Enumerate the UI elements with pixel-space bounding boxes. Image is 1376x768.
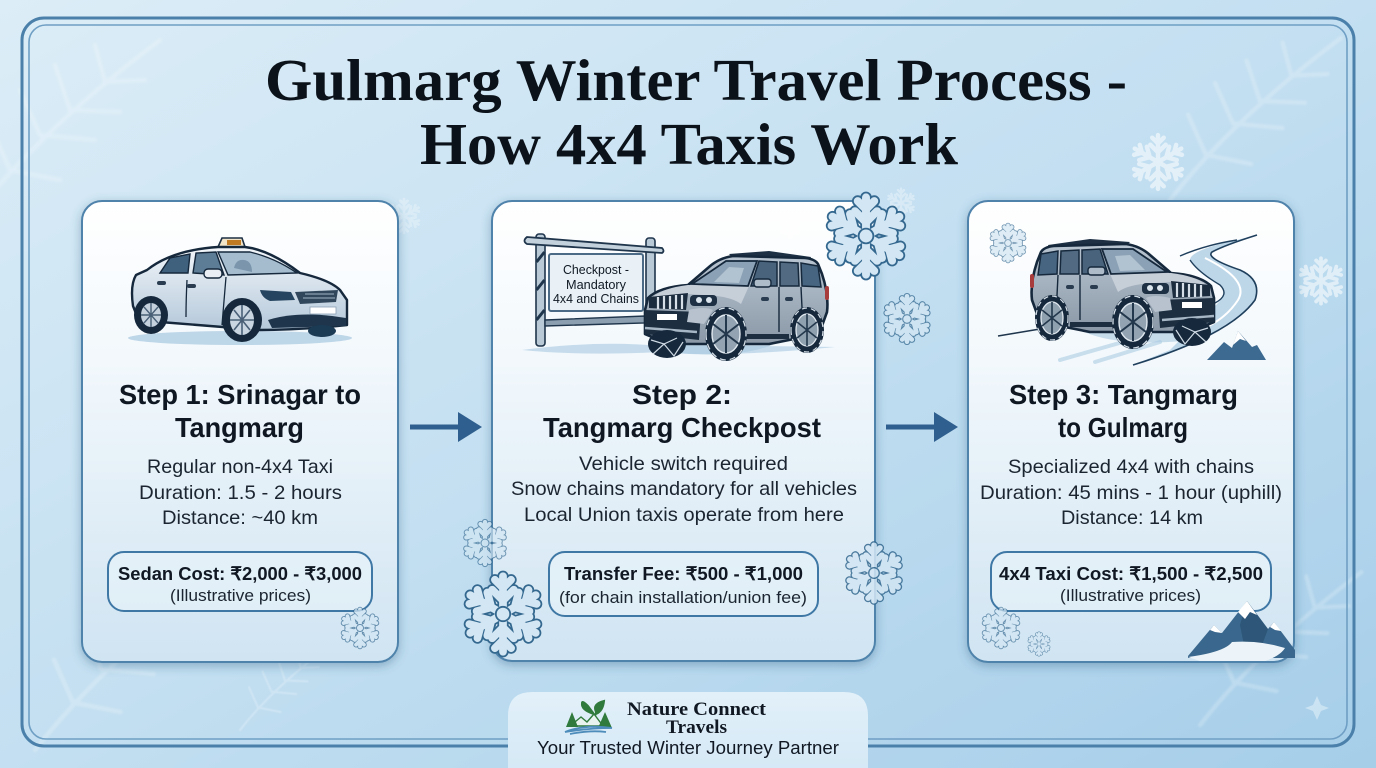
cost box — [991, 552, 1271, 611]
panel: step 3 — [968, 201, 1295, 662]
footer badge — [508, 692, 868, 768]
panel: step 2 — [492, 201, 875, 661]
details: Snow chains mandatory for all vehicles — [511, 478, 857, 500]
heading: Step 3: Tangmarg — [1009, 379, 1238, 410]
fee box — [549, 552, 818, 616]
illustration: 4x4 at checkpost — [645, 251, 829, 361]
snowflakes around step 2 — [464, 197, 930, 652]
details — [139, 456, 342, 529]
details — [980, 456, 1282, 529]
illustration: checkpost sign: 4x4 and Chains — [553, 291, 639, 306]
arrow: step 2 to 3 — [886, 412, 958, 442]
details: Regular non-4x4 Taxi — [147, 456, 333, 478]
heading: Step 2: — [632, 379, 732, 410]
cost box: (Illustrative prices) — [1060, 587, 1201, 605]
background snowflakes — [387, 135, 1344, 720]
heading: Step 1: Srinagar to — [119, 379, 361, 410]
cost box: 4x4 Taxi Cost: ₹1,500 - ₹2,500 — [999, 563, 1263, 584]
heading: to Gulmarg — [1058, 412, 1188, 443]
cost box: Sedan Cost: ₹2,000 - ₹3,000 — [118, 563, 362, 584]
illustration: checkpost sign — [522, 234, 835, 354]
title — [265, 47, 1127, 177]
footer badge: Your Trusted Winter Journey Partner — [537, 738, 839, 758]
icon: mountain small — [1207, 331, 1266, 360]
arrow: step 1 to 2 — [410, 412, 482, 442]
illustration: taxi — [128, 238, 352, 345]
cost box: (Illustrative prices) — [170, 587, 311, 605]
panel: step 1 — [82, 201, 398, 662]
illustration: 4x4 on road — [1030, 239, 1214, 349]
cost box — [108, 552, 372, 611]
icon: small snowflakes — [982, 225, 1050, 655]
details: Distance: ~40 km — [162, 507, 318, 529]
illustration: winding road — [998, 235, 1257, 365]
fee box: Transfer Fee: ₹500 - ₹1,000 — [564, 563, 803, 584]
details: Distance: 14 km — [1061, 507, 1203, 529]
icon: snowflake — [341, 610, 379, 646]
heading: Tangmarg — [175, 412, 304, 443]
logo — [565, 701, 612, 734]
details — [511, 453, 857, 526]
footer badge: Nature Connect — [627, 700, 767, 720]
illustration: checkpost sign: Checkpost - — [563, 262, 629, 277]
illustration: checkpost sign: Mandatory — [566, 277, 626, 292]
heading — [1009, 379, 1238, 443]
details: Vehicle switch required — [579, 453, 788, 475]
details: Local Union taxis operate from here — [524, 504, 844, 526]
details: Duration: 1.5 - 2 hours — [139, 482, 342, 504]
fee box: (for chain installation/union fee) — [559, 589, 807, 607]
title: Gulmarg Winter Travel Process - — [265, 47, 1127, 113]
details: Duration: 45 mins - 1 hour (uphill) — [980, 482, 1282, 504]
icon: mountains — [1188, 601, 1295, 661]
heading: Tangmarg Checkpost — [543, 412, 821, 443]
heading — [119, 379, 361, 443]
details: Specialized 4x4 with chains — [1008, 456, 1254, 478]
footer badge: Travels — [666, 718, 727, 738]
title: How 4x4 Taxis Work — [420, 111, 958, 177]
heading — [543, 379, 821, 443]
